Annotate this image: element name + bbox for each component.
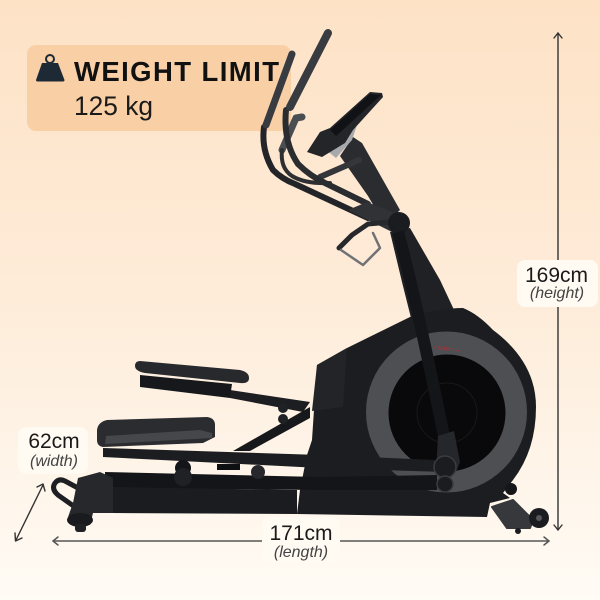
console [307,92,383,158]
arrow: height [554,33,562,530]
rear short tube [282,117,330,183]
icon: weight [36,55,64,82]
swing arm [398,232,444,436]
arrow: width [15,484,45,541]
upper pedal [135,361,310,412]
panel: weight limit [27,45,291,131]
label: height: 169cm [525,264,588,287]
label: width: (width) [30,453,78,470]
flywheel housing [297,308,536,517]
label: width: 62cm [28,430,80,453]
label: width [18,427,88,474]
bottle holder [339,222,390,265]
pivot wheels [434,456,456,492]
text: 125 kg: 125 kg [74,91,153,121]
right handle [286,33,368,204]
elliptical machine [54,33,549,534]
upper column [340,137,400,225]
brand text: • SPIRIT ••• [434,345,460,355]
label: length: (length) [274,544,328,561]
left handle [263,54,368,218]
front stabiliser [492,483,549,534]
label: height: (height) [530,285,584,302]
heading: weight limit: WEIGHT LIMIT [74,56,279,87]
label: length: 171cm [269,522,333,545]
cross bar [320,160,359,177]
label: length [262,517,340,563]
flywheel ring [366,332,527,492]
rails [105,460,437,514]
lower pedal [97,417,445,472]
rear stabiliser [54,472,113,532]
pivot [388,212,410,234]
handle sleeve [348,202,402,232]
cross link [233,407,310,451]
label: height [517,260,598,307]
arrow: length [53,537,549,545]
lower column [390,228,455,322]
